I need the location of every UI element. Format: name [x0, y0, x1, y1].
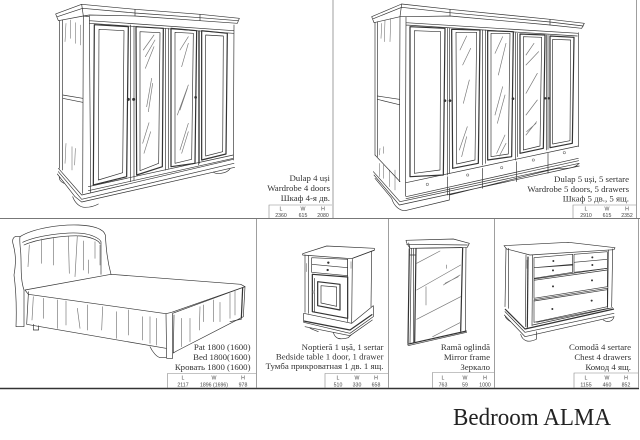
- dimension table: wardrobe 4 doors: H: [321, 206, 325, 212]
- dimension table: chest of drawers: 1155: [580, 382, 592, 388]
- panel: mirror frame: [406, 239, 494, 388]
- dimension table: wardrobe 4 doors: [269, 205, 332, 219]
- dimension table: wardrobe 4 doors: 615: [299, 213, 307, 219]
- dimension table: wardrobe 4 doors: 2360: [275, 213, 287, 219]
- dimension table: bedside table: [325, 374, 388, 388]
- dimension table: wardrobe 5 doors: H: [625, 206, 629, 212]
- dimension table: wardrobe 5 doors: 2910: [580, 213, 592, 219]
- dimension table: wardrobe 5 doors: 2352: [621, 213, 633, 219]
- dimension table: chest of drawers: W: [605, 376, 610, 382]
- dimension table: bedside table: 330: [353, 382, 361, 388]
- dimension table: chest of drawers: H: [624, 376, 628, 382]
- title: Bedroom ALMA: [453, 405, 612, 431]
- panel: wardrobe 5 doors: [372, 4, 636, 219]
- dimension table: bed: 1896 (1696): [200, 382, 228, 388]
- dimension table: wardrobe 4 doors: W: [301, 206, 306, 212]
- caption: bedside table: Тумба прикроватная 1 дв. 1 ящ.: [266, 361, 384, 371]
- dimension table: bed: L: [182, 376, 185, 382]
- dimension table: chest of drawers: L: [585, 376, 588, 382]
- caption: chest of drawers: Комод 4 ящ.: [585, 362, 631, 372]
- illustration: bedside table: [303, 246, 374, 339]
- dimension table: mirror frame: 1000: [479, 382, 491, 388]
- dimension table: chest of drawers: 460: [603, 382, 611, 388]
- caption: bed: Pat 1800 (1600): [194, 342, 251, 352]
- dimension table: bed: 978: [239, 382, 247, 388]
- dimension table: bed: 2117: [177, 382, 189, 388]
- illustration: wardrobe 4 doors: [56, 4, 239, 207]
- dimension table: bedside table: L: [337, 376, 340, 382]
- panel: chest of drawers: [504, 242, 638, 388]
- caption: mirror frame: Ramă oglindă: [441, 342, 490, 352]
- dimension table: bedside table: 510: [334, 382, 342, 388]
- caption: wardrobe 4 doors: Шкаф 4-я дв.: [281, 193, 330, 203]
- caption: mirror frame: Mirror frame: [444, 352, 490, 362]
- caption: bed: Bed 1800(1600): [193, 352, 251, 362]
- caption: bedside table: Bedside table 1 door, 1 drawer: [276, 352, 384, 362]
- dimension table: bed: W: [212, 376, 217, 382]
- dimension table: wardrobe 5 doors: W: [605, 206, 610, 212]
- caption: bedside table: Noptieră 1 ușă, 1 sertar: [302, 342, 384, 352]
- dimension table: wardrobe 4 doors: 2080: [317, 213, 329, 219]
- caption: wardrobe 4 doors: Dulap 4 uși: [289, 173, 331, 183]
- caption: wardrobe 5 doors: Wardrobe 5 doors, 5 drawers: [527, 184, 630, 194]
- dimension table: wardrobe 5 doors: L: [585, 206, 588, 212]
- caption: bed: Кровать 1800 (1600): [175, 362, 251, 372]
- dimension table: bedside table: H: [374, 376, 378, 382]
- dimension table: chest of drawers: [574, 373, 638, 388]
- dimension table: chest of drawers: 852: [622, 382, 630, 388]
- dimension table: mirror frame: H: [483, 376, 487, 382]
- dimension table: wardrobe 5 doors: [573, 205, 636, 219]
- dimension table: bed: H: [241, 376, 245, 382]
- caption: chest of drawers: Chest 4 drawers: [574, 352, 632, 362]
- panel: bed: [13, 225, 256, 388]
- caption: mirror frame: Зеркало: [460, 362, 491, 372]
- panel: wardrobe 4 doors: [56, 4, 332, 219]
- dimension table: bedside table: 658: [372, 382, 380, 388]
- illustration: mirror frame: [406, 239, 469, 346]
- panel: bedside table: [266, 246, 388, 388]
- dimension table: wardrobe 5 doors: 615: [603, 213, 611, 219]
- dimension table: mirror frame: [432, 372, 494, 388]
- caption: wardrobe 5 doors: Dulap 5 uși, 5 sertare: [554, 174, 629, 184]
- dimension table: mirror frame: 59: [462, 382, 468, 388]
- dimension table: mirror frame: W: [463, 376, 468, 382]
- illustration: bed: [13, 225, 245, 358]
- dimension table: mirror frame: L: [442, 376, 445, 382]
- caption: wardrobe 4 doors: Wardrobe 4 doors: [267, 183, 331, 193]
- dimension table: bedside table: W: [355, 376, 360, 382]
- illustration: wardrobe 5 doors: [372, 4, 584, 211]
- caption: wardrobe 5 doors: Шкаф 5 дв., 5 ящ.: [563, 194, 629, 204]
- caption: chest of drawers: Comodă 4 sertare: [569, 342, 631, 352]
- dimension table: bed: [168, 374, 256, 388]
- dimension table: wardrobe 4 doors: L: [280, 206, 283, 212]
- dimension table: mirror frame: 763: [439, 382, 447, 388]
- illustration: chest of drawers: [504, 242, 615, 341]
